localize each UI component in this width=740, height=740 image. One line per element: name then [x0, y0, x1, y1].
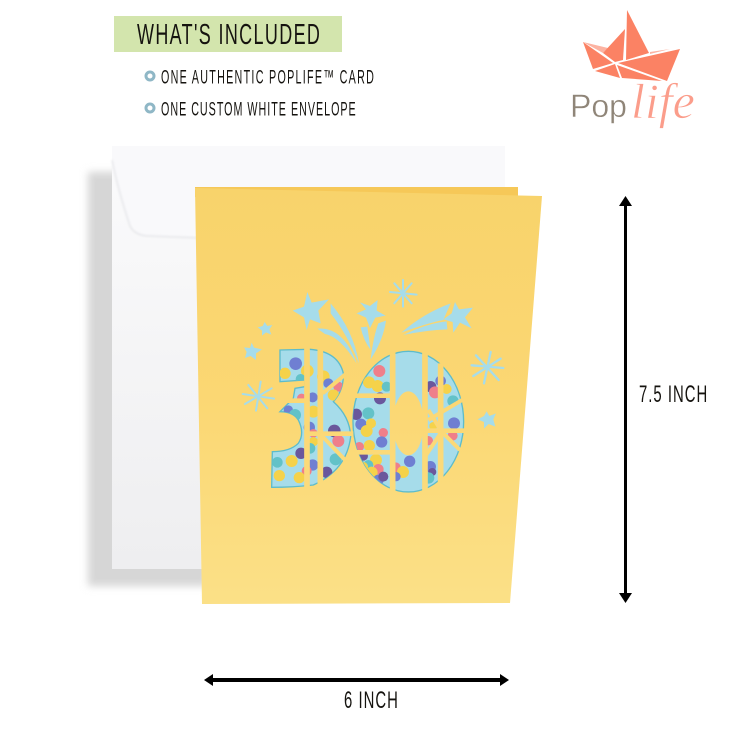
- envelope shadow: [88, 172, 208, 586]
- label: height: 7.5 INCH: [639, 382, 707, 408]
- list: included items: [146, 67, 374, 120]
- sparkles: [243, 280, 503, 411]
- paper strips: [278, 345, 467, 495]
- heading: what's included: WHAT'S INCLUDED: [137, 19, 320, 51]
- card back: [195, 187, 518, 197]
- fireworks stars: [244, 292, 496, 429]
- envelope flap: [112, 146, 505, 238]
- logo: poplife: [570, 10, 695, 129]
- cutout: fireworks and 30: [243, 280, 503, 495]
- digits base: [272, 349, 464, 492]
- wordmark: Pop: [570, 88, 627, 124]
- item: one custom white envelope: ONE CUSTOM WHITE ENVELOPE: [161, 99, 356, 120]
- arrow: width: [204, 674, 509, 686]
- envelope: [88, 146, 505, 586]
- card front: [195, 188, 542, 604]
- item: one authentic poplife card: ONE AUTHENTIC POPLIFE™ CARD: [161, 67, 374, 88]
- label: width: 6 INCH: [344, 688, 398, 714]
- arrow: height: [619, 196, 632, 603]
- digit zero counter: [393, 391, 424, 455]
- card: [195, 187, 542, 604]
- icon: paper boat: [583, 10, 680, 81]
- logo: poplife: life: [631, 73, 695, 129]
- confetti dots: [272, 357, 460, 485]
